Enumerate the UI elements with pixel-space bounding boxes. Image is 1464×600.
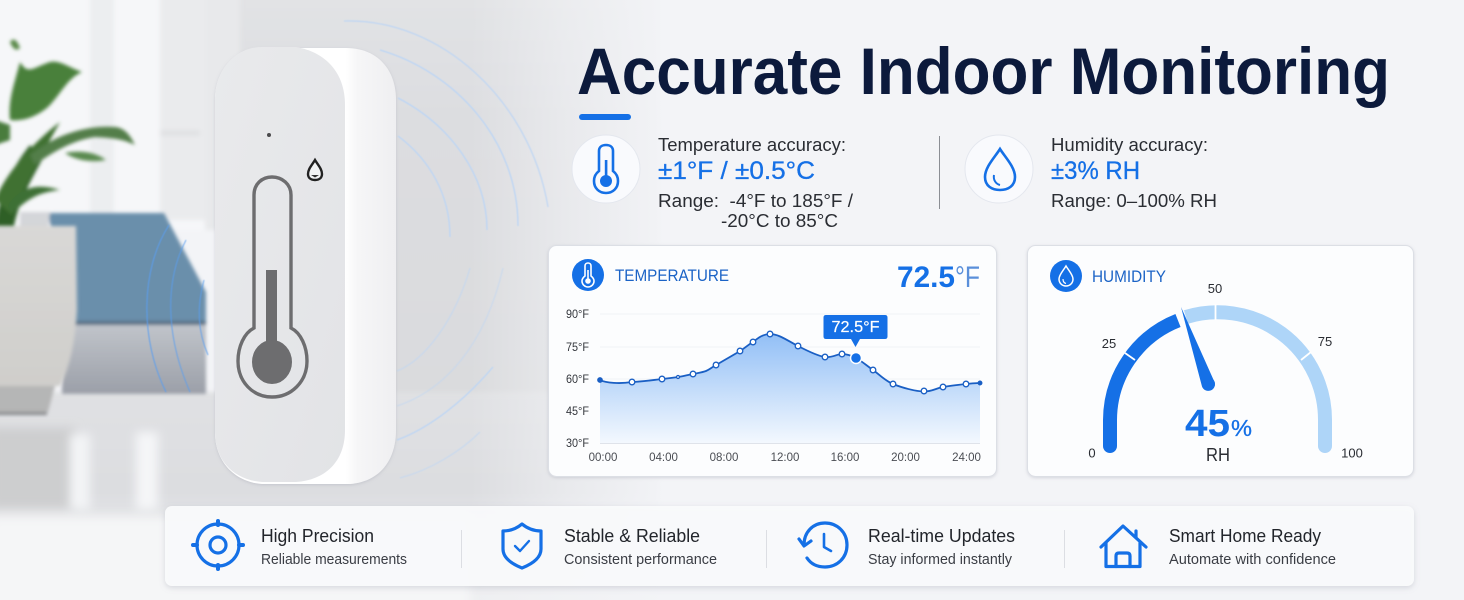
temperature range celsius: -20°C to 85°C [721, 210, 838, 231]
gauge needle [1181, 307, 1215, 391]
icon: target [193, 521, 243, 569]
wall fade to page colour [470, 0, 710, 600]
icon: thermometer circle [572, 135, 640, 203]
temperature range: Range: -4°F to 185°F / [658, 190, 854, 211]
feature caption: Automate with confidence [1169, 552, 1336, 568]
tooltip [824, 315, 888, 347]
feature: real-time updates [799, 523, 1015, 568]
icon: shield [503, 524, 541, 568]
y axis labels: 30°F [566, 438, 589, 450]
gauge ticks [1125, 304, 1311, 360]
gauge labels: 75 [1318, 334, 1332, 349]
humidity heading: HUMIDITY [1092, 268, 1166, 286]
x axis labels: 04:00 [649, 452, 678, 464]
temperature heading: TEMPERATURE [615, 267, 729, 285]
y axis labels: 75°F [566, 342, 589, 354]
device thermometer symbol [238, 177, 307, 397]
device drop icon [308, 160, 322, 180]
y axis labels: 60°F [566, 374, 589, 386]
signal waves around device [147, 21, 548, 478]
x axis labels: 16:00 [831, 452, 859, 464]
data points [598, 331, 982, 394]
gauge filled arc [1110, 320, 1178, 446]
x axis labels: 20:00 [891, 452, 920, 464]
icon: clock history [799, 523, 847, 567]
gauge remaining arc [1186, 312, 1325, 446]
humidity accuracy block [965, 134, 1217, 211]
feature title: Smart Home Ready [1169, 526, 1321, 546]
feature: high precision [193, 521, 407, 569]
humidity range: Range: 0–100% RH [1051, 190, 1217, 211]
icon: humidity badge [1050, 260, 1082, 292]
gauge labels [1088, 281, 1363, 460]
current temperature reading: °F [955, 261, 980, 294]
humidity reading: 45 [1185, 403, 1230, 445]
icon: temperature badge [572, 259, 604, 291]
device: thermometer sensor [215, 47, 396, 484]
feature title: High Precision [261, 526, 374, 546]
area fill [600, 334, 980, 443]
plant [0, 40, 135, 226]
x axis labels: 00:00 [589, 452, 617, 464]
x axis labels: 24:00 [952, 452, 981, 464]
title: Accurate Indoor Monitoring [577, 34, 1390, 108]
gauge [1088, 281, 1363, 465]
accuracy divider [939, 136, 940, 209]
x axis labels: 12:00 [771, 452, 799, 464]
device front face [215, 47, 345, 482]
temperature accuracy block [572, 134, 854, 231]
highlighted point [850, 352, 862, 364]
y axis labels [566, 309, 589, 450]
feature title: Stable & Reliable [564, 526, 700, 546]
feature: smart home ready [1101, 526, 1336, 568]
temperature accuracy value: ±1°F / ±0.5°C [658, 157, 815, 185]
panel: temperature [548, 246, 996, 476]
gauge labels: 0 [1088, 446, 1096, 460]
feature: stable and reliable [503, 524, 717, 568]
icon: house [1101, 526, 1146, 566]
feature caption: Consistent performance [564, 552, 717, 568]
y axis labels: 45°F [566, 406, 589, 418]
temperature accuracy label: Temperature accuracy: [658, 134, 846, 155]
gauge labels: 25 [1102, 336, 1116, 351]
humidity accuracy label: Humidity accuracy: [1051, 134, 1208, 155]
device status dot [267, 133, 271, 137]
sofa [20, 212, 206, 394]
humidity reading: % [1231, 415, 1252, 441]
panel: humidity [1028, 246, 1414, 476]
title underline [579, 114, 631, 120]
pot [0, 226, 77, 415]
gauge labels: 100 [1341, 446, 1363, 460]
x axis labels: 08:00 [710, 452, 738, 464]
y axis labels: 90°F [566, 309, 589, 321]
feature caption: Stay informed instantly [868, 552, 1013, 568]
humidity reading [1185, 403, 1252, 445]
table top [0, 392, 660, 600]
back wall [240, 0, 660, 435]
RH unit: RH [1206, 445, 1230, 465]
feature bar [165, 506, 1414, 586]
humidity accuracy value: ±3% RH [1051, 157, 1140, 185]
feature title: Real-time Updates [868, 526, 1015, 546]
current temperature reading: 72.5 [897, 261, 955, 294]
icon: water drop circle [965, 135, 1033, 203]
feature caption: Reliable measurements [261, 552, 407, 568]
tooltip: 72.5°F [832, 319, 880, 336]
window light [0, 0, 245, 230]
x axis labels [589, 452, 981, 464]
line chart [566, 309, 982, 464]
gauge labels: 50 [1208, 281, 1222, 296]
temperature line [600, 334, 980, 392]
